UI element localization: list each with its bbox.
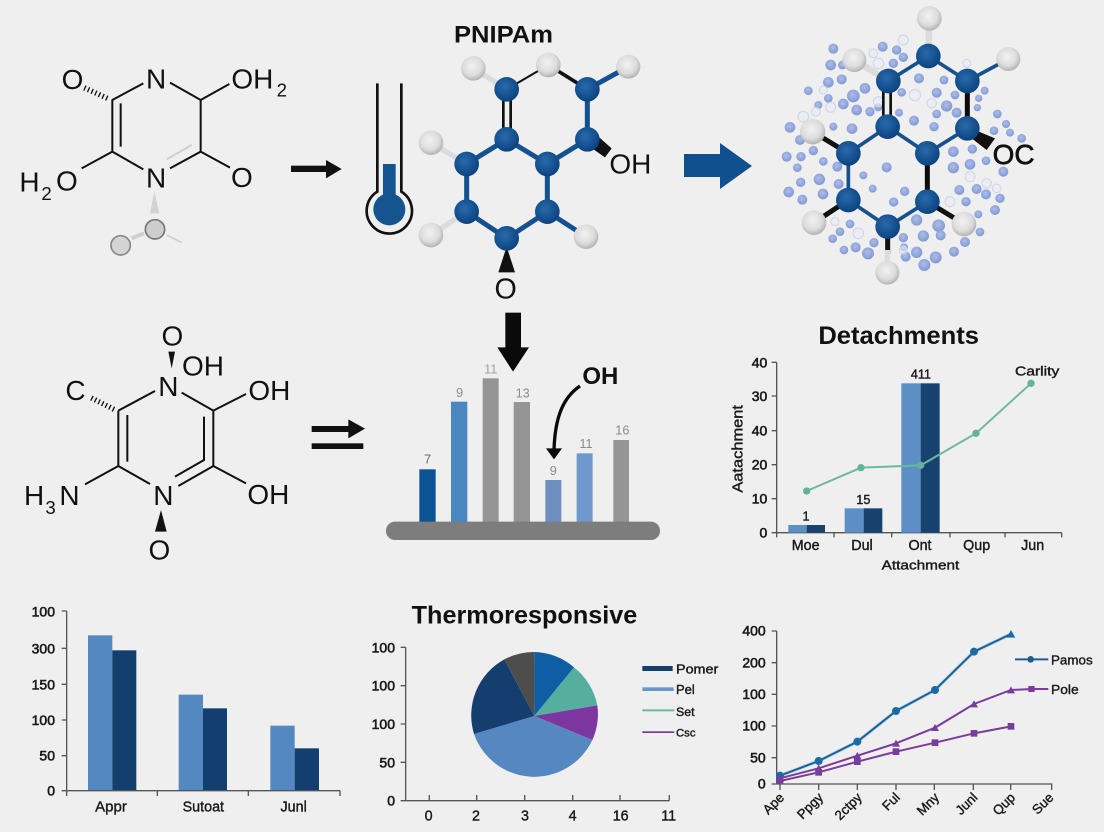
chart: Thermoresponsive pie: 4 (569, 809, 577, 825)
molecule: middle-left ring structure: OH (248, 375, 290, 406)
chart: bottom-right line chart: 100 (742, 718, 766, 734)
chart: bottom-left grouped bars: 50 (39, 748, 55, 764)
pie legend: Csc (676, 728, 696, 740)
chart: bottom-right line chart: 100 (742, 686, 766, 702)
molecule: middle-left ring structure: N (153, 480, 173, 511)
molecule: middle-left ring structure: OH (247, 479, 289, 510)
chart: Thermoresponsive pie: 100 (372, 639, 395, 655)
chart: bottom-left grouped bars (32, 604, 340, 816)
molecule: top-left ring structure: 2 (41, 183, 52, 204)
arrow: equilibrium (312, 419, 365, 449)
chart: bottom-right line chart: Qup (990, 790, 1018, 818)
molecule: top-left ring structure: O (62, 64, 83, 95)
arrow: large blue (684, 143, 752, 189)
chart: bottom-right line chart: Ppgy (794, 790, 826, 822)
chart: Thermoresponsive pie: 3 (521, 809, 529, 825)
molecule: middle-left ring structure: N (158, 371, 178, 402)
chart: bottom-right line chart: Ape (760, 790, 787, 817)
pie legend: Set (676, 705, 695, 719)
chart: Detachments bar and line: Carlity (1015, 365, 1060, 379)
line chart legend: Pole (1051, 682, 1079, 697)
chart: Detachments bar and line: 15 (856, 493, 870, 507)
molecule: top-left ring structure: N (146, 63, 166, 94)
chart: bottom-right line chart: Sue (1029, 790, 1056, 817)
chart: Detachments bar and line: 40 (752, 423, 768, 439)
molecule: middle-left ring structure: O (148, 534, 170, 565)
bar chart: center on platform: 7 (424, 453, 431, 467)
molecule: top-left ring structure: N (146, 163, 166, 194)
chart: Detachments bar and line: Attachment (882, 557, 960, 572)
molecule: PNIPAm ball and stick (419, 53, 651, 305)
molecule: top-left ring structure (19, 63, 287, 255)
chart: Detachments bar and line: 40 (752, 354, 768, 370)
heading: Thermoresponsive: Thermoresponsive (412, 601, 637, 629)
chart: bottom-right line chart: Ful (879, 790, 903, 814)
line chart legend: Pamos (1051, 652, 1093, 667)
chart: bottom-right line chart: 50 (750, 749, 766, 765)
chart: bottom-right line chart (742, 623, 1093, 823)
bar chart: center on platform: 11 (579, 437, 593, 451)
callout: OH with curved arrow: OH (582, 363, 618, 390)
molecule: middle-left ring structure: C (65, 375, 86, 406)
bar chart: center on platform: 16 (615, 424, 629, 438)
chart: Thermoresponsive pie: 50 (379, 754, 395, 770)
bar chart: center on platform: 13 (516, 386, 530, 400)
chart: Detachments bar and line: Ont (908, 538, 932, 554)
chart: Detachments bar and line: 0 (760, 525, 768, 541)
arrow: top-left to thermometer (291, 160, 342, 178)
bar chart: center on platform (386, 363, 660, 540)
chart: Detachments bar and line: 10 (752, 491, 768, 507)
chart: bottom-right line chart: 2ctpy (832, 790, 865, 823)
bar chart: center on platform: 9 (550, 464, 557, 478)
chart: Thermoresponsive pie: 0 (387, 793, 395, 809)
chart: bottom-left grouped bars: Appr (95, 799, 127, 816)
chart: Thermoresponsive pie: 100 (372, 678, 395, 694)
pie legend: Pomer (676, 662, 718, 676)
heading: Detachments: Detachments (818, 322, 979, 350)
chart: Thermoresponsive pie: 0 (425, 809, 433, 825)
chart: Detachments bar and line: Jun (1021, 538, 1044, 554)
chart: bottom-left grouped bars: 100 (32, 712, 55, 728)
molecule: middle-left ring structure: H (24, 480, 44, 511)
molecule: middle-left ring structure: O (161, 320, 183, 351)
icon: thermometer (367, 83, 412, 234)
chart: bottom-left grouped bars: Junl (281, 800, 307, 816)
pie legend (642, 662, 718, 740)
chart: Thermoresponsive pie: 100 (372, 716, 395, 732)
molecule: PNIPAm with surrounding particles: OC (993, 139, 1035, 170)
chart: bottom-left grouped bars: 0 (47, 783, 55, 799)
title: PNIPAm: PNIPAm (454, 22, 553, 48)
chart: bottom-left grouped bars: 150 (32, 676, 55, 692)
chart: Detachments bar and line (731, 322, 1062, 572)
chart: bottom-left grouped bars: 300 (32, 640, 55, 656)
chart: Detachments bar and line: 411 (911, 368, 931, 382)
chart: Detachments bar and line: 30 (752, 388, 768, 404)
molecule: top-left ring structure: 2 (277, 80, 287, 101)
callout: OH with curved arrow (546, 363, 618, 459)
molecule: middle-left ring structure: OH (182, 351, 224, 382)
molecule: PNIPAm ball and stick: OH (609, 149, 651, 180)
chart: Detachments bar and line: Dul (851, 538, 873, 554)
chart: Thermoresponsive pie (372, 601, 718, 825)
chart: bottom-right line chart: Junl (953, 790, 980, 818)
chart: bottom-right line chart: Mny (914, 790, 942, 818)
chart: Detachments bar and line: Qup (963, 538, 990, 554)
molecule: middle-left ring structure: 3 (45, 497, 56, 518)
chart: bottom-right line chart: 200 (742, 654, 766, 670)
line chart legend (1015, 652, 1093, 697)
pie legend: Pel (676, 682, 695, 697)
bar chart: center on platform: 9 (456, 386, 463, 400)
molecule: middle-left ring structure: N (59, 480, 80, 511)
molecule: PNIPAm with surrounding particles (782, 6, 1035, 285)
molecule: top-left ring structure: O (231, 162, 253, 193)
chart: bottom-left grouped bars: Sutoat (183, 800, 224, 816)
chart: Detachments bar and line: Aatachment (731, 405, 747, 493)
chart: bottom-left grouped bars: 100 (32, 604, 55, 620)
chart: bottom-right line chart: 400 (742, 623, 766, 639)
chart: Thermoresponsive pie: 2 (472, 809, 480, 825)
chart: Detachments bar and line: Moe (792, 538, 820, 554)
molecule: PNIPAm ball and stick: O (495, 273, 517, 305)
molecule: top-left ring structure: O (56, 166, 78, 197)
chart: Detachments bar and line: 20 (752, 457, 768, 473)
molecule: middle-left ring structure (24, 320, 290, 565)
molecule: top-left ring structure: OH (231, 63, 273, 94)
chart: Detachments bar and line: 1 (802, 509, 810, 523)
chart: Thermoresponsive pie: 11 (661, 809, 676, 825)
molecule: top-left ring structure: H (19, 167, 40, 198)
chart: Thermoresponsive pie: 16 (613, 809, 629, 825)
arrow: large black down (497, 313, 529, 372)
chart: bottom-right line chart: 0 (758, 776, 766, 792)
bar chart: center on platform: 11 (484, 363, 497, 377)
